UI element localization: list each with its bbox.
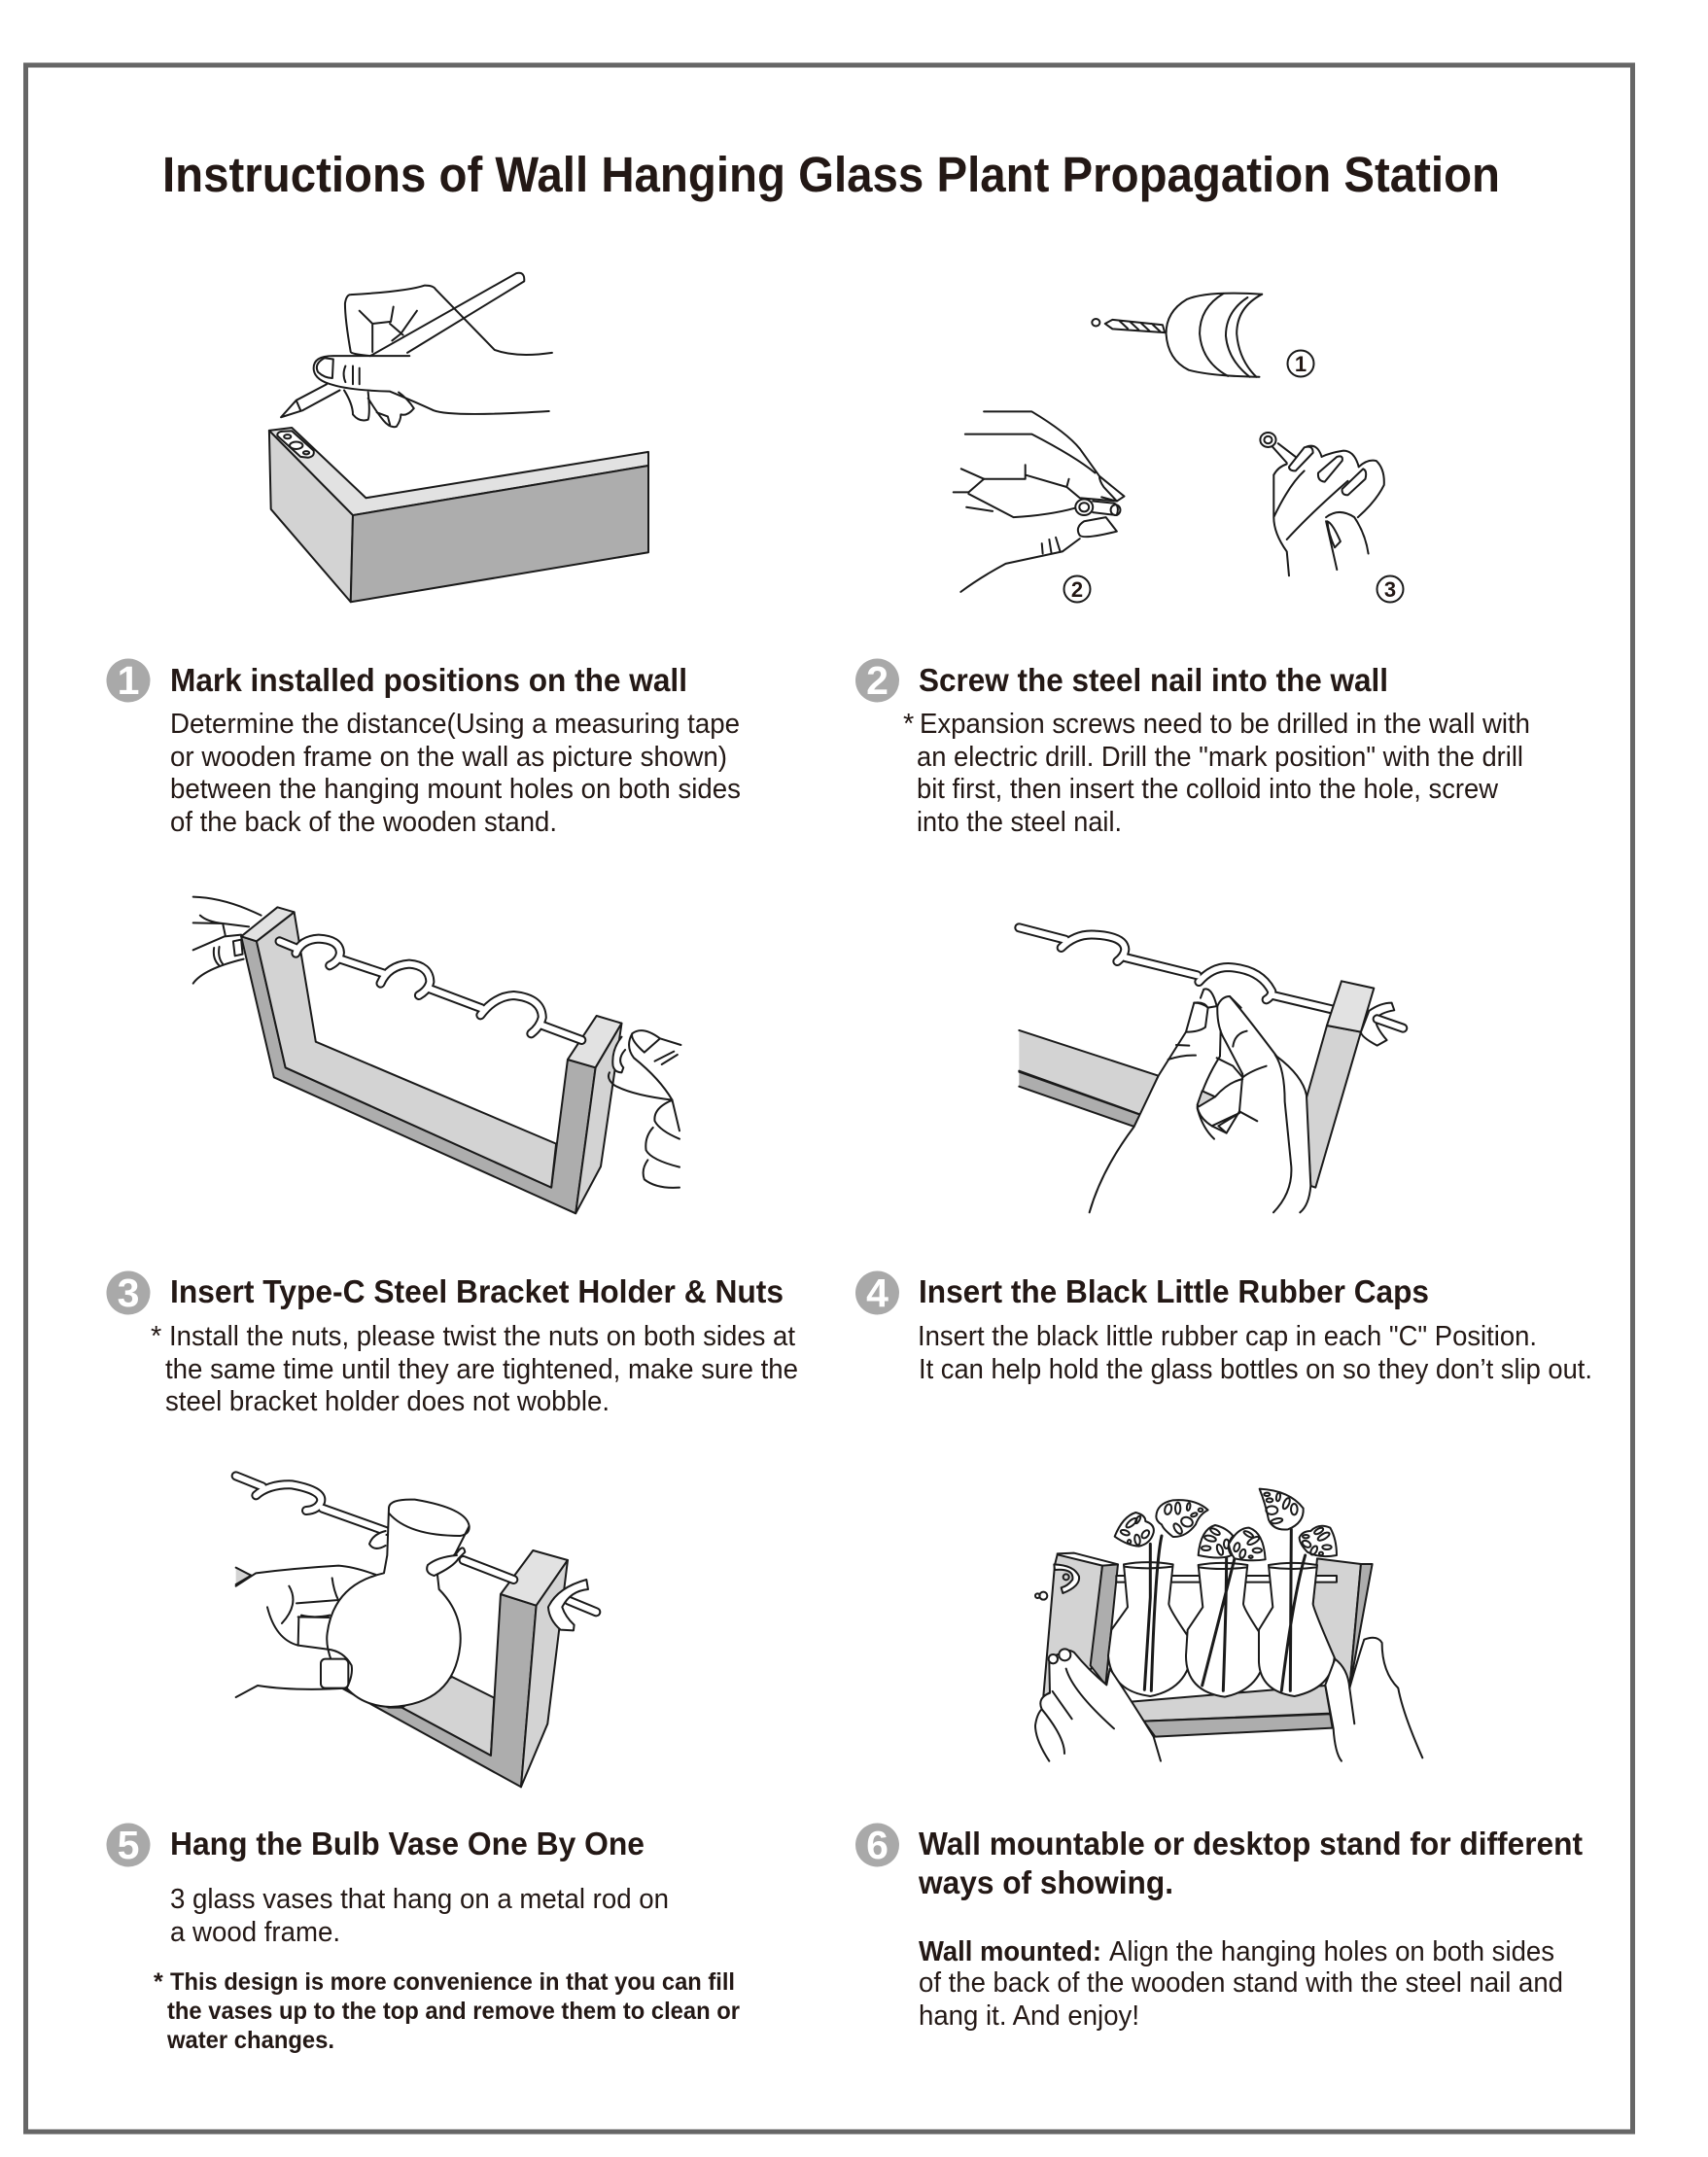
step 2 text: * [903, 709, 914, 740]
step 3 text: steel bracket holder does not wobble. [165, 1386, 610, 1417]
step 4 text [918, 1321, 1592, 1385]
step 5 text [170, 1884, 669, 1948]
step 2 text: Expansion screws need to be drilled in the wall with [920, 709, 1530, 740]
sub-step marker 1 [1287, 350, 1314, 377]
step 6 badge: 6 [866, 1823, 889, 1867]
illustration: inserting bracket holder in frame [193, 897, 680, 1213]
step 5 badge [107, 1823, 150, 1867]
sub-step marker 2 [1063, 575, 1091, 603]
step 5 note [154, 1968, 740, 2054]
step 1 text: Determine the distance(Using a measuring tape [170, 709, 740, 740]
step 5 note: the vases up to the top and remove them to clean or [167, 1998, 740, 2025]
step 5 note: water changes. [166, 2027, 334, 2054]
step 3 badge [107, 1270, 150, 1315]
step 3 text [151, 1321, 798, 1417]
step 1 text: or wooden frame on the wall as picture shown) [170, 742, 727, 773]
step 1 heading: Mark installed positions on the wall [170, 662, 687, 698]
title: Instructions of Wall Hanging Glass Plant Propagation Station [162, 147, 1500, 202]
step 6 text: of the back of the wooden stand with the steel nail and [919, 1967, 1563, 1999]
step 6 text [919, 1936, 1563, 2032]
step 4 badge [855, 1270, 899, 1315]
step 5 note: This design is more convenience in that you can fill [170, 1968, 735, 1996]
step 4 heading: Insert the Black Little Rubber Caps [919, 1273, 1429, 1309]
step 5 text: a wood frame. [170, 1917, 340, 1948]
step 3 badge: 3 [118, 1270, 139, 1315]
sub-step marker 1: 1 [1295, 352, 1307, 376]
step 2 text [903, 709, 1530, 838]
step 1 text: between the hanging mount holes on both sides [170, 774, 741, 805]
step 6 badge [855, 1823, 899, 1867]
step 6 text: Align the hanging holes on both sides [1109, 1936, 1554, 1967]
illustration: inserting rubber caps [1019, 927, 1403, 1212]
step 4 badge: 4 [866, 1270, 889, 1315]
step 6 text: Wall mounted: [919, 1936, 1101, 1967]
step 6 heading [918, 1826, 1583, 1900]
step 1 badge: 1 [118, 658, 139, 703]
step 1 badge [107, 658, 150, 703]
sub-step marker 2: 2 [1071, 577, 1083, 602]
step 3 heading: Insert Type-C Steel Bracket Holder & Nuts [170, 1273, 784, 1309]
step 2 text: an electric drill. Drill the "mark position" with the drill [917, 742, 1523, 773]
sub-step marker 3: 3 [1384, 577, 1396, 602]
step 4 text: It can help hold the glass bottles on so they don’t slip out. [919, 1354, 1592, 1385]
illustration: frame with three vases and plants [1035, 1489, 1422, 1761]
step 5 text: 3 glass vases that hang on a metal rod on [170, 1884, 669, 1915]
step 2 text: into the steel nail. [917, 807, 1122, 838]
step 3 text: * [151, 1321, 161, 1352]
illustration: drill and expansion screw [954, 294, 1384, 592]
step 5 badge: 5 [118, 1823, 139, 1867]
sub-step marker 3 [1377, 575, 1404, 603]
step 2 badge: 2 [866, 658, 889, 703]
step 2 text: bit first, then insert the colloid into the hole, screw [917, 774, 1499, 805]
step 5 heading: Hang the Bulb Vase One By One [170, 1826, 645, 1861]
step 1 text: of the back of the wooden stand. [170, 807, 557, 838]
step 6 heading: ways of showing. [918, 1864, 1173, 1900]
step 6 heading: Wall mountable or desktop stand for different [919, 1826, 1583, 1861]
step 3 text: the same time until they are tightened, make sure the [165, 1354, 798, 1385]
step 2 heading: Screw the steel nail into the wall [919, 662, 1388, 698]
step 6 text: hang it. And enjoy! [919, 2000, 1139, 2032]
step 4 text: Insert the black little rubber cap in each "C" Position. [918, 1321, 1537, 1352]
step 5 note: * [154, 1968, 163, 1996]
step 1 text [170, 709, 741, 838]
illustration: hand marking wood frame with pencil [269, 273, 648, 602]
step 3 text: Install the nuts, please twist the nuts on both sides at [169, 1321, 795, 1352]
illustration: hanging the bulb vase [236, 1476, 596, 1787]
step 2 badge [855, 658, 899, 703]
